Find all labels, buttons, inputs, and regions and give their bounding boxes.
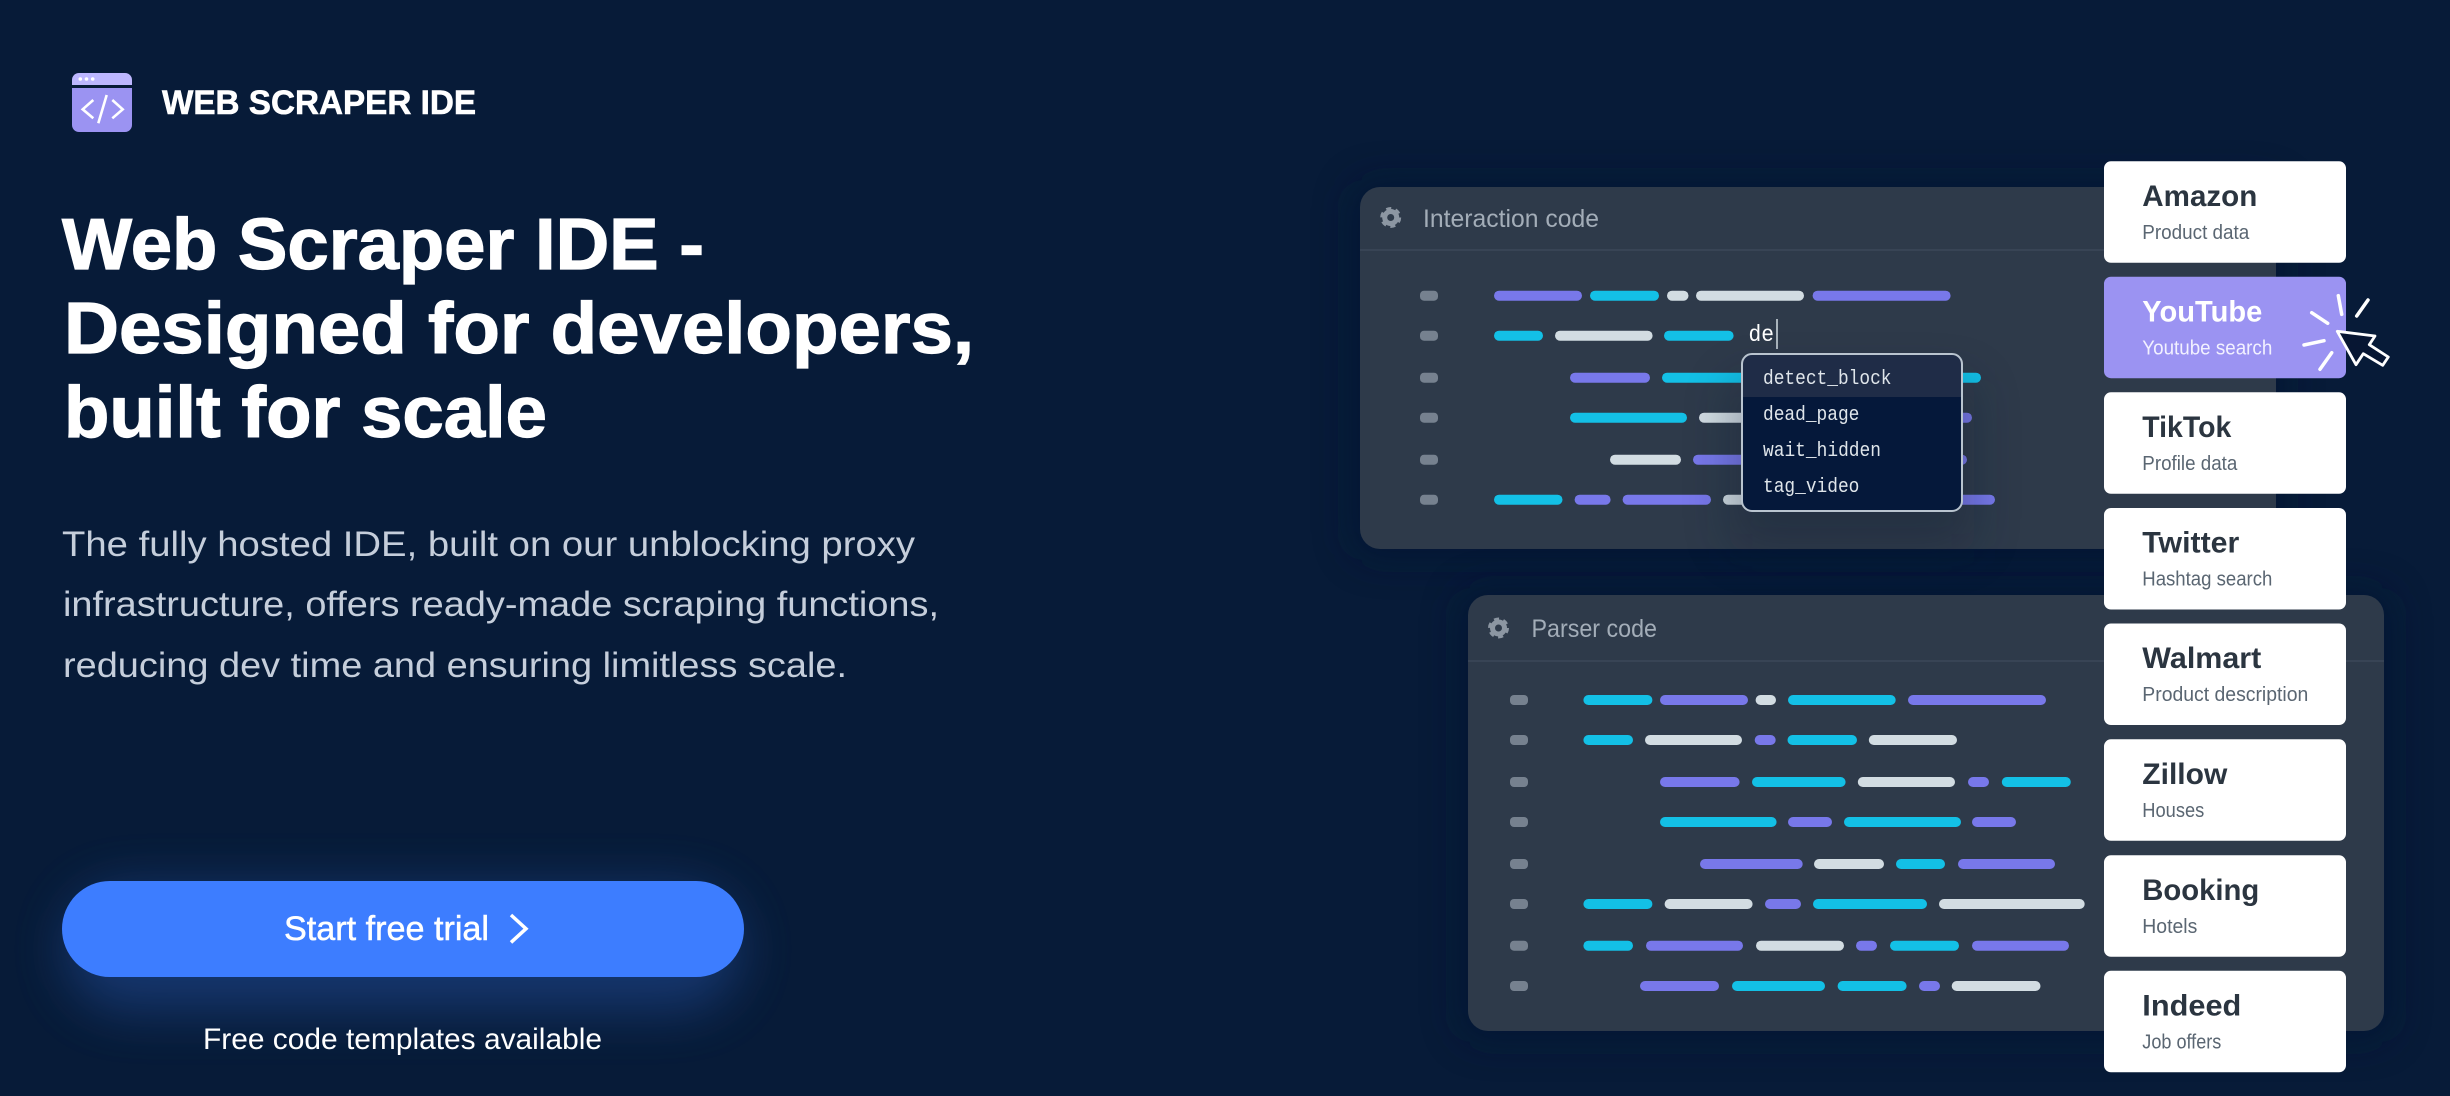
code row 3 <box>1660 777 2071 787</box>
card: Zillow: Houses <box>2142 800 2204 822</box>
card: Walmart <box>2104 624 2346 725</box>
card: Amazon: Amazon <box>2142 180 2257 213</box>
panel: interaction code <box>1350 180 2286 560</box>
line numbers <box>1420 291 1438 505</box>
code row 5 <box>1610 455 1967 465</box>
card: TikTok: TikTok <box>2142 411 2232 444</box>
description paragraph <box>62 525 939 685</box>
icon: gear <box>1490 619 1508 637</box>
logo: window with code brackets <box>72 73 132 132</box>
code row 2 <box>1583 735 1957 745</box>
title: built for scale <box>64 373 547 453</box>
caption under button: Free code templates available <box>203 1023 602 1056</box>
card: Indeed <box>2104 971 2346 1072</box>
title: Web Scraper IDE - <box>62 205 704 285</box>
card: YouTube highlighted: YouTube <box>2142 295 2262 328</box>
code row 4 <box>1660 817 2016 827</box>
card: Twitter <box>2104 508 2346 610</box>
call to action button <box>62 881 744 1010</box>
card: Zillow: Zillow <box>2142 758 2228 791</box>
card: YouTube highlighted <box>2104 277 2346 378</box>
icon: mouse cursor <box>2337 331 2388 365</box>
description paragraph: The fully hosted IDE, built on our unblocking proxy <box>62 525 916 564</box>
card: TikTok: Profile data <box>2142 453 2238 475</box>
panel heading: Parser code <box>1532 615 1657 643</box>
code row 8 <box>1640 981 2040 991</box>
autocomplete popup <box>1730 354 1974 550</box>
code row 1 <box>1494 291 1951 301</box>
description paragraph: infrastructure, offers ready-made scraping functions, <box>63 585 939 624</box>
autocomplete popup: dead_page <box>1763 404 1859 427</box>
title: Designed for developers, <box>64 289 974 369</box>
card: Walmart: Product description <box>2142 684 2308 706</box>
icon: click sparks <box>2304 296 2368 369</box>
code row 1 <box>1583 695 2046 705</box>
code row 2 with typed text <box>1494 319 1777 349</box>
card: Indeed: Job offers <box>2142 1032 2221 1054</box>
card: Amazon <box>2104 161 2346 263</box>
card: Twitter: Twitter <box>2142 527 2240 560</box>
card: Booking: Hotels <box>2142 916 2197 938</box>
card: Indeed: Indeed <box>2142 990 2241 1022</box>
logo wordmark: WEB SCRAPER IDE <box>162 84 476 122</box>
code row 3 <box>1570 373 1981 383</box>
card: Zillow <box>2104 739 2346 841</box>
autocomplete popup: tag_video <box>1763 476 1859 499</box>
code row 7 <box>1583 941 2069 951</box>
code row 4 <box>1570 413 1972 423</box>
code row 5 <box>1700 859 2055 869</box>
line numbers <box>1510 695 1528 991</box>
autocomplete popup: detect_block <box>1763 368 1892 391</box>
card: Twitter: Hashtag search <box>2142 569 2272 591</box>
card: TikTok <box>2104 392 2346 494</box>
card: Booking <box>2104 855 2346 957</box>
card: Walmart: Walmart <box>2142 642 2261 675</box>
autocomplete popup: wait_hidden <box>1763 440 1881 463</box>
description paragraph: reducing dev time and ensuring limitless scale. <box>63 646 847 685</box>
card: Amazon: Product data <box>2142 222 2250 244</box>
icon: gear <box>1382 208 1400 226</box>
panel heading: Interaction code <box>1423 205 1599 233</box>
panel: parser code <box>1458 588 2394 1042</box>
call to action button: Start free trial <box>284 910 489 948</box>
card: Booking: Booking <box>2142 874 2259 907</box>
code row 6 <box>1583 899 2085 909</box>
code row 6 <box>1494 495 1995 505</box>
title <box>62 205 974 453</box>
code row 2 with typed text: de <box>1748 322 1774 348</box>
card: YouTube highlighted: Youtube search <box>2142 337 2272 359</box>
